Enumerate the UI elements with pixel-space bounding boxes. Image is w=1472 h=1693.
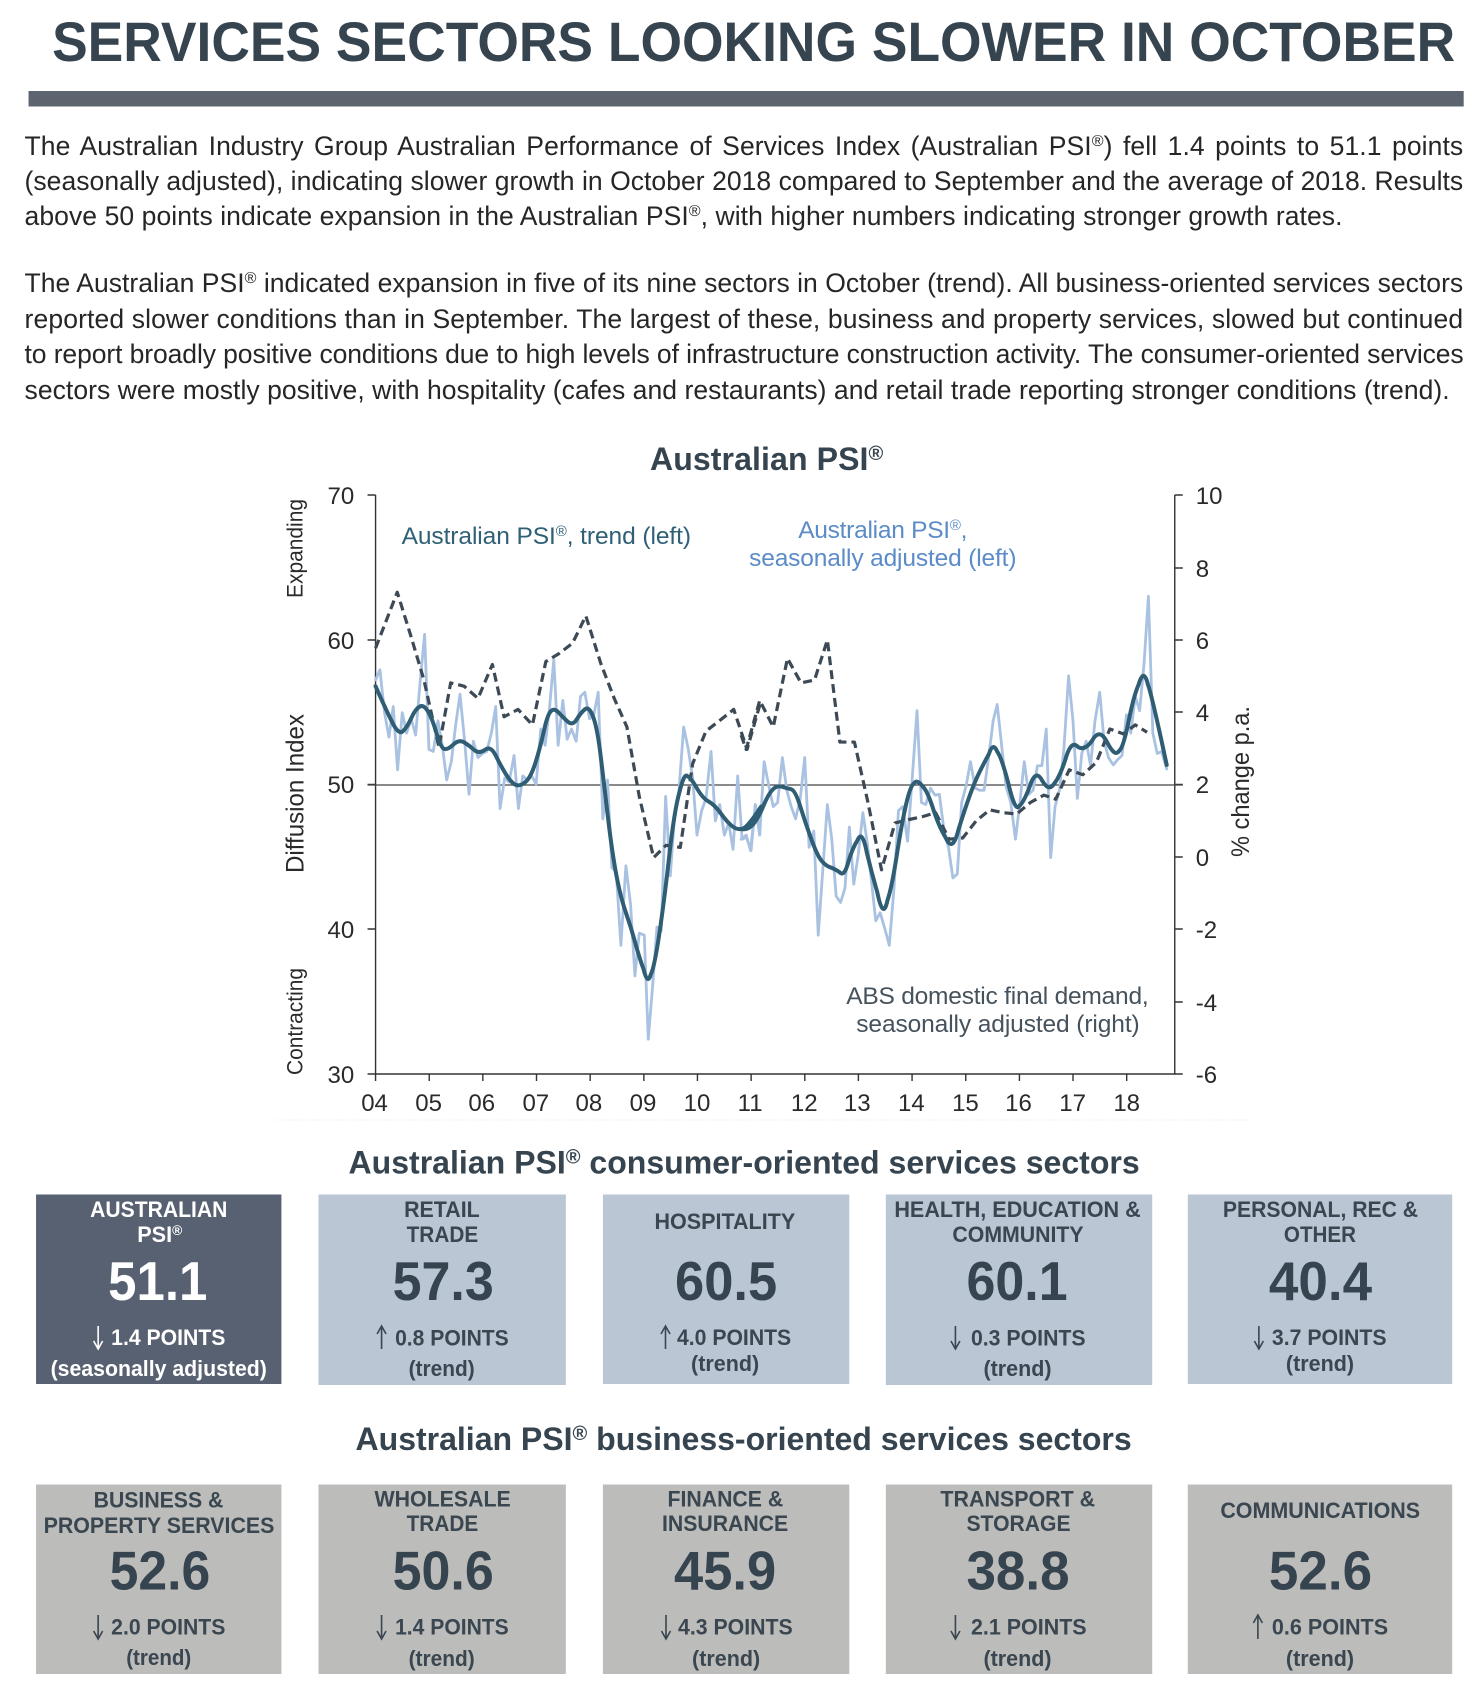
text block: second paragraph: reported slower conditions than in September. The largest of these, business and property services, slowed but continued <box>25 304 1463 334</box>
heading: chart title: ® <box>869 443 884 465</box>
right axis labels <box>1196 483 1223 1089</box>
change: 0.8 POINTS <box>395 1326 509 1350</box>
legend label: seasonally adjusted: seasonally adjusted (left) <box>749 545 1017 572</box>
right axis labels: -6 <box>1196 1062 1217 1089</box>
legend label: trend: Australian PSI <box>402 523 556 550</box>
right axis title: % change p.a. <box>1227 706 1255 857</box>
legend label: ABS domestic final demand: seasonally adjusted (right) <box>856 1011 1140 1038</box>
right axis labels: 0 <box>1196 845 1209 872</box>
left axis labels <box>327 483 354 1089</box>
value: 60.5 <box>675 1250 777 1312</box>
value: 38.8 <box>966 1540 1070 1601</box>
basis: (trend) <box>983 1646 1052 1671</box>
x axis labels: 10 <box>684 1090 710 1117</box>
icon: down arrow <box>94 1326 103 1349</box>
panel title: TRANSPORT & <box>940 1487 1095 1511</box>
text block: second paragraph: ® <box>245 270 257 287</box>
basis: (trend) <box>691 1351 759 1376</box>
heading: chart title: Australian PSI <box>650 441 868 477</box>
value: 45.9 <box>674 1540 776 1601</box>
panel title <box>404 1197 480 1247</box>
text block: intro paragraph: ) fell 1.4 points to 51.1 points <box>1104 131 1463 161</box>
legend label: trend: , trend (left) <box>567 523 691 550</box>
x axis labels: 13 <box>844 1090 871 1117</box>
value: 52.6 <box>110 1540 210 1601</box>
series: trend <box>376 676 1167 979</box>
x axis labels: 09 <box>630 1090 656 1117</box>
y axis title: Contracting: Contracting <box>282 968 307 1075</box>
right axis labels: 10 <box>1196 483 1223 510</box>
panel title: HOSPITALITY <box>654 1209 795 1234</box>
x axis labels: 12 <box>791 1090 818 1117</box>
text block: intro paragraph: The Australian Industry Group Australian Performance of Services Index (Australian PSI <box>25 131 1092 161</box>
heading: business-oriented sectors: ® <box>573 1423 588 1445</box>
series: ABS domestic final demand <box>376 592 1147 870</box>
text block: second paragraph: The Australian PSI <box>25 268 245 298</box>
x axis labels <box>361 1090 1140 1117</box>
text block: second paragraph <box>25 268 1464 405</box>
x axis labels: 16 <box>1005 1090 1032 1117</box>
change: 1.4 POINTS <box>395 1615 509 1639</box>
legend label: trend: ® <box>556 523 567 540</box>
left axis labels: 60 <box>327 628 354 655</box>
text block: second paragraph: indicated expansion in five of its nine sectors in October (trend). All business-oriented services sectors <box>256 268 1463 298</box>
panel title: PERSONAL, REC & <box>1223 1197 1418 1222</box>
panel title: WHOLESALE <box>375 1487 511 1511</box>
y axis title: Diffusion Index: Diffusion Index <box>281 714 309 873</box>
text block: intro paragraph: above 50 points indicate expansion in the Australian PSI <box>25 201 689 231</box>
panel title <box>44 1488 274 1538</box>
panel title: HEALTH, EDUCATION & <box>894 1197 1141 1222</box>
change: 4.3 POINTS <box>678 1615 793 1639</box>
panel: transport and storage <box>886 1484 1152 1674</box>
x axis labels: 04 <box>361 1090 388 1117</box>
text block: intro paragraph: , with higher numbers indicating stronger growth rates. <box>701 201 1343 231</box>
panel: finance and insurance <box>603 1484 849 1674</box>
y axis title: Expanding: Expanding <box>282 499 307 598</box>
panel: retail trade <box>318 1194 566 1385</box>
basis: (trend) <box>983 1356 1052 1381</box>
50 reference line <box>368 784 1183 786</box>
icon: down arrow <box>951 1615 960 1639</box>
x axis labels: 08 <box>576 1090 602 1117</box>
value: 50.6 <box>393 1540 494 1601</box>
icon: up arrow <box>1253 1615 1262 1639</box>
basis: (seasonally adjusted) <box>51 1356 267 1381</box>
x axis labels: 06 <box>468 1090 495 1117</box>
text block: intro paragraph: ® <box>689 203 701 220</box>
panel: hospitality <box>603 1194 849 1384</box>
title rule <box>29 91 1464 106</box>
icon: up arrow <box>377 1326 386 1349</box>
icon: down arrow <box>951 1326 960 1349</box>
value: 52.6 <box>1269 1540 1372 1601</box>
left axis labels: 70 <box>327 483 354 510</box>
x axis labels: 05 <box>415 1090 442 1117</box>
icon: down arrow <box>94 1615 103 1639</box>
heading: business-oriented sectors: business-oriented services sectors <box>587 1421 1132 1457</box>
panel: business and property services <box>36 1484 281 1674</box>
value: 57.3 <box>393 1250 494 1312</box>
legend label: ABS domestic final demand <box>846 983 1149 1038</box>
change: 2.1 POINTS <box>971 1615 1087 1639</box>
panel title: OTHER <box>1284 1222 1356 1247</box>
change: 4.0 POINTS <box>677 1325 791 1350</box>
panel title: BUSINESS & <box>94 1488 223 1512</box>
panel: personal, rec and other <box>1188 1194 1452 1384</box>
legend label: seasonally adjusted: Australian PSI <box>798 517 950 544</box>
panel: communications <box>1188 1484 1452 1674</box>
left axis labels: 50 <box>327 772 354 799</box>
axis frame and ticks <box>368 495 1183 1081</box>
heading: consumer-oriented sectors: Australian PSI <box>349 1145 566 1180</box>
text block: intro paragraph: ® <box>1092 133 1104 150</box>
line chart: Australian PSI <box>281 483 1255 1117</box>
value: 60.1 <box>966 1250 1068 1312</box>
panel title <box>90 1197 227 1247</box>
right axis labels: 2 <box>1196 772 1209 799</box>
legend label: seasonally adjusted: , <box>961 517 967 544</box>
panel: health, education and community <box>886 1194 1152 1385</box>
basis: (trend) <box>692 1646 760 1671</box>
basis: (trend) <box>409 1646 475 1671</box>
basis: (trend) <box>1286 1351 1354 1376</box>
panel title: AUSTRALIAN <box>90 1197 227 1222</box>
text block: second paragraph: to report broadly positive conditions due to high levels of infrastructure construction activity. The consumer-oriented services <box>25 339 1464 369</box>
icon: down arrow <box>1254 1326 1263 1349</box>
change: 1.4 POINTS <box>111 1325 225 1350</box>
panel title: TRADE <box>407 1222 478 1247</box>
legend label: ABS domestic final demand: ABS domestic final demand, <box>846 983 1149 1010</box>
panel title: ® <box>172 1222 183 1238</box>
right axis labels: 8 <box>1196 556 1209 583</box>
heading: business-oriented sectors: Australian PSI <box>356 1421 573 1457</box>
basis: (trend) <box>409 1356 475 1381</box>
panel title: COMMUNITY <box>952 1222 1084 1247</box>
x axis labels: 15 <box>952 1090 979 1117</box>
right axis labels: -2 <box>1196 917 1217 944</box>
text block: intro paragraph: (seasonally adjusted), indicating slower growth in October 2018 compared to September and the average of 2018. Results <box>25 166 1463 196</box>
panel title: FINANCE & <box>667 1487 783 1511</box>
right axis labels: 6 <box>1196 628 1209 655</box>
panel: wholesale trade <box>318 1484 566 1674</box>
text block: intro paragraph <box>25 131 1463 231</box>
change: 3.7 POINTS <box>1272 1325 1387 1350</box>
icon: down arrow <box>377 1615 386 1639</box>
panel: Australian PSI <box>36 1194 281 1384</box>
panel title <box>894 1197 1141 1247</box>
panel title: TRADE <box>407 1511 478 1536</box>
series: seasonally adjusted <box>376 596 1167 1039</box>
panel title: STORAGE <box>966 1511 1071 1536</box>
heading: consumer-oriented sectors: ® <box>566 1147 581 1168</box>
left axis labels: 40 <box>327 917 354 944</box>
change: 0.3 POINTS <box>971 1326 1086 1350</box>
panel title: COMMUNICATIONS <box>1220 1498 1420 1523</box>
x axis labels: 14 <box>898 1090 925 1117</box>
panel title <box>375 1487 511 1536</box>
panel title: PSI <box>137 1222 173 1247</box>
icon: up arrow <box>661 1326 670 1349</box>
basis: (trend) <box>126 1645 191 1670</box>
value: 51.1 <box>108 1250 207 1312</box>
panel title: RETAIL <box>404 1197 480 1222</box>
panel title: INSURANCE <box>662 1511 788 1536</box>
x axis labels: 11 <box>738 1090 763 1117</box>
value: 40.4 <box>1269 1250 1372 1312</box>
text block: second paragraph: sectors were mostly positive, with hospitality (cafes and restaurants) and retail trade reporting stronger conditions (trend). <box>25 375 1450 405</box>
right axis labels: 4 <box>1196 700 1209 727</box>
x axis labels: 18 <box>1113 1090 1140 1117</box>
change: 2.0 POINTS <box>111 1615 225 1639</box>
legend label: seasonally adjusted: ® <box>950 517 961 534</box>
x axis labels: 17 <box>1059 1090 1086 1117</box>
basis: (trend) <box>1286 1646 1354 1671</box>
panel title <box>662 1487 788 1536</box>
legend label: seasonally adjusted <box>749 517 1017 572</box>
panel title: PROPERTY SERVICES <box>44 1513 274 1538</box>
panel title <box>940 1487 1095 1536</box>
change: 0.6 POINTS <box>1272 1615 1388 1639</box>
right axis labels: -4 <box>1196 990 1217 1017</box>
panel title <box>1223 1197 1418 1247</box>
icon: down arrow <box>661 1615 671 1639</box>
heading: consumer-oriented sectors: consumer-oriented services sectors <box>581 1145 1140 1180</box>
left axis labels: 30 <box>327 1062 354 1089</box>
x axis labels: 07 <box>522 1090 549 1117</box>
